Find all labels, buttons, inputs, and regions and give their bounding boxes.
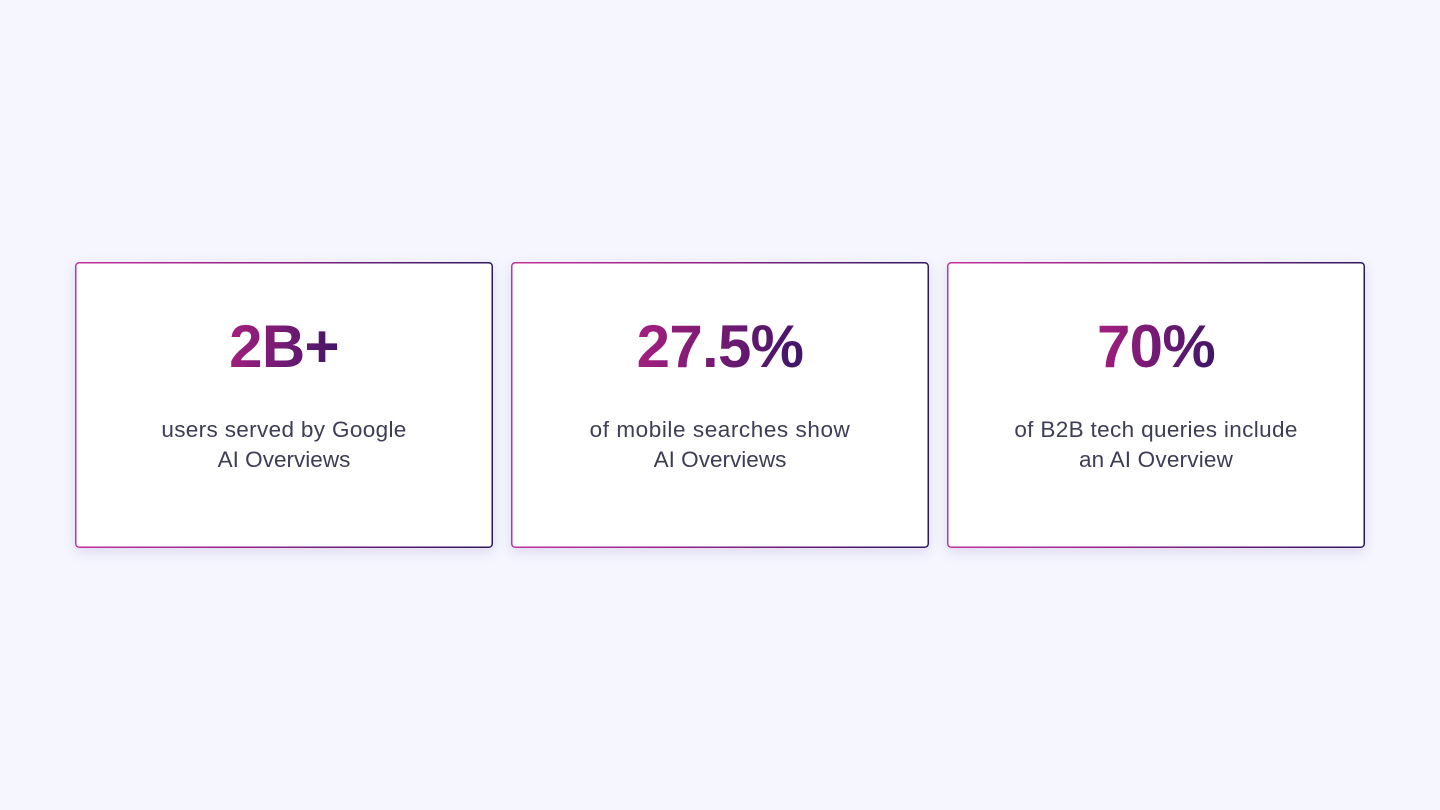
text: B2B queries: [1014, 417, 1298, 472]
text: B2B queries: of B2B tech queries include: [1014, 417, 1298, 442]
stat: 27.5%: 27.5%: [637, 313, 803, 380]
text: users served: AI Overviews: [218, 446, 350, 472]
stat: 70%: 70%: [1097, 313, 1215, 380]
panel: 70% B2B queries: [947, 262, 1365, 548]
text: mobile searches: of mobile searches show: [590, 417, 850, 442]
text: users served: users served by Google: [161, 417, 407, 442]
panel: 2B+ users: [75, 262, 493, 548]
text: mobile searches: AI Overviews: [654, 446, 786, 472]
stat: 2B+: 2B+: [229, 313, 339, 380]
text: B2B queries: an AI Overview: [1079, 446, 1233, 472]
panel: 27.5% mobile searches: [511, 262, 929, 548]
text: users served: [161, 417, 407, 472]
text: mobile searches: [590, 417, 850, 472]
